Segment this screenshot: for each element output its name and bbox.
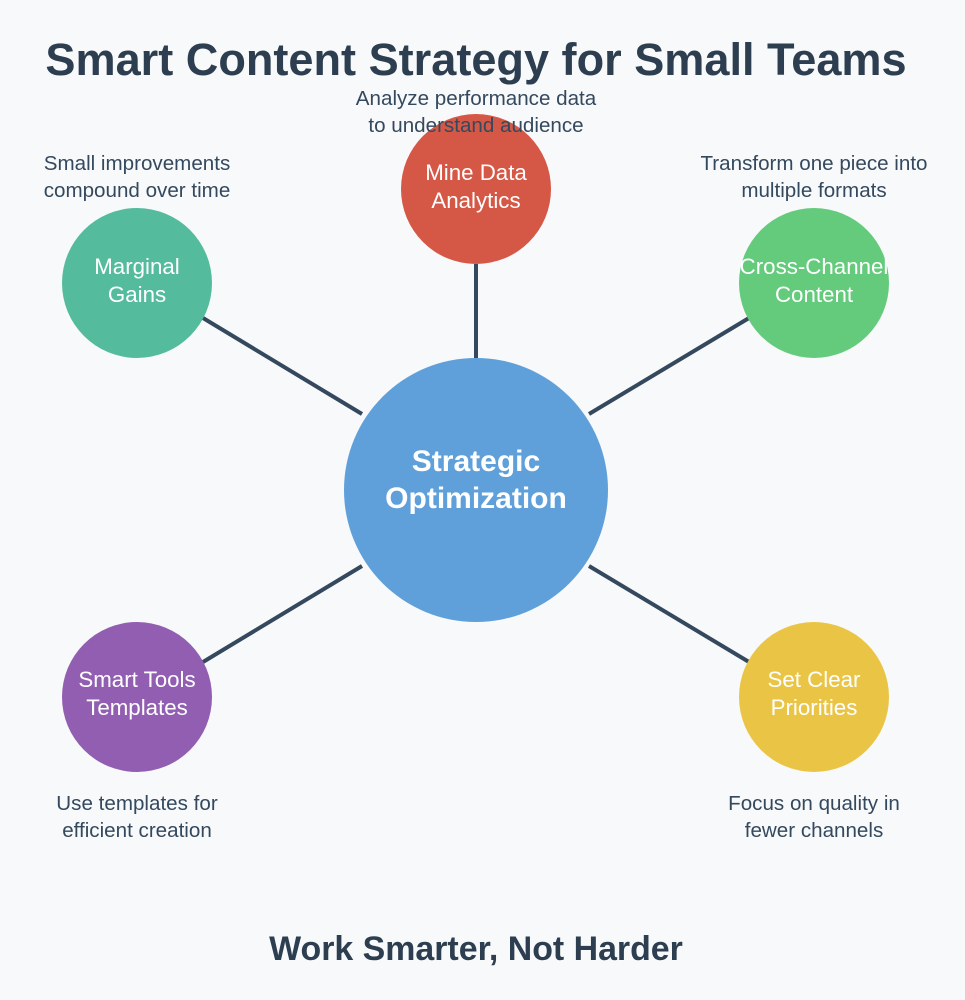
description: Smart Tools Templates [56, 792, 218, 842]
footer tagline: Work Smarter, Not Harder [269, 930, 683, 968]
central hub: Strategic Optimization [344, 358, 608, 622]
node: Marginal Gains: Gains [108, 282, 166, 307]
connector: center to Smart Tools Templates [203, 566, 362, 662]
title: Smart Content Strategy for Small Teams [45, 34, 907, 85]
central hub: Strategic Optimization: Optimization [385, 482, 567, 515]
node: Cross-Channel Content: Content [775, 282, 854, 307]
connector: center to Cross-Channel Content [589, 318, 749, 414]
connector: center to Marginal Gains [203, 318, 362, 414]
node: Marginal Gains [62, 208, 212, 358]
node: Cross-Channel Content: Cross-Channel [740, 254, 888, 279]
connector: center to Mine Data Analytics [474, 264, 478, 358]
node: Mine Data Analytics: Mine Data [425, 160, 527, 185]
description: Set Clear Priorities: fewer channels [745, 819, 883, 842]
description: Mine Data Analytics [356, 87, 597, 137]
description: Marginal Gains [44, 152, 230, 202]
description: Set Clear Priorities: Focus on quality in [728, 792, 900, 815]
description: Cross-Channel Content [700, 152, 928, 202]
node: Set Clear Priorities: Priorities [771, 695, 857, 720]
description: Smart Tools Templates: efficient creation [62, 819, 212, 842]
node: Cross-Channel Content [739, 208, 889, 358]
node: Smart Tools Templates: Templates [86, 695, 188, 720]
node: Smart Tools Templates [62, 622, 212, 772]
connector: center to Set Clear Priorities [589, 566, 749, 662]
description: Cross-Channel Content: Transform one piece into [700, 152, 928, 175]
node: Marginal Gains: Marginal [94, 254, 180, 279]
node: Smart Tools Templates: Smart Tools [78, 667, 196, 692]
node: Mine Data Analytics [401, 114, 551, 264]
description: Set Clear Priorities [728, 792, 900, 842]
description: Marginal Gains: compound over time [44, 179, 230, 202]
description: Marginal Gains: Small improvements [44, 152, 230, 175]
node: Mine Data Analytics: Analytics [431, 188, 521, 213]
central hub: Strategic Optimization: Strategic [412, 445, 540, 478]
description: Mine Data Analytics: Analyze performance data [356, 87, 597, 110]
node: Set Clear Priorities [739, 622, 889, 772]
node: Set Clear Priorities: Set Clear [768, 667, 861, 692]
description: Cross-Channel Content: multiple formats [741, 179, 887, 202]
description: Smart Tools Templates: Use templates for [56, 792, 218, 815]
description: Mine Data Analytics: to understand audience [368, 114, 584, 137]
